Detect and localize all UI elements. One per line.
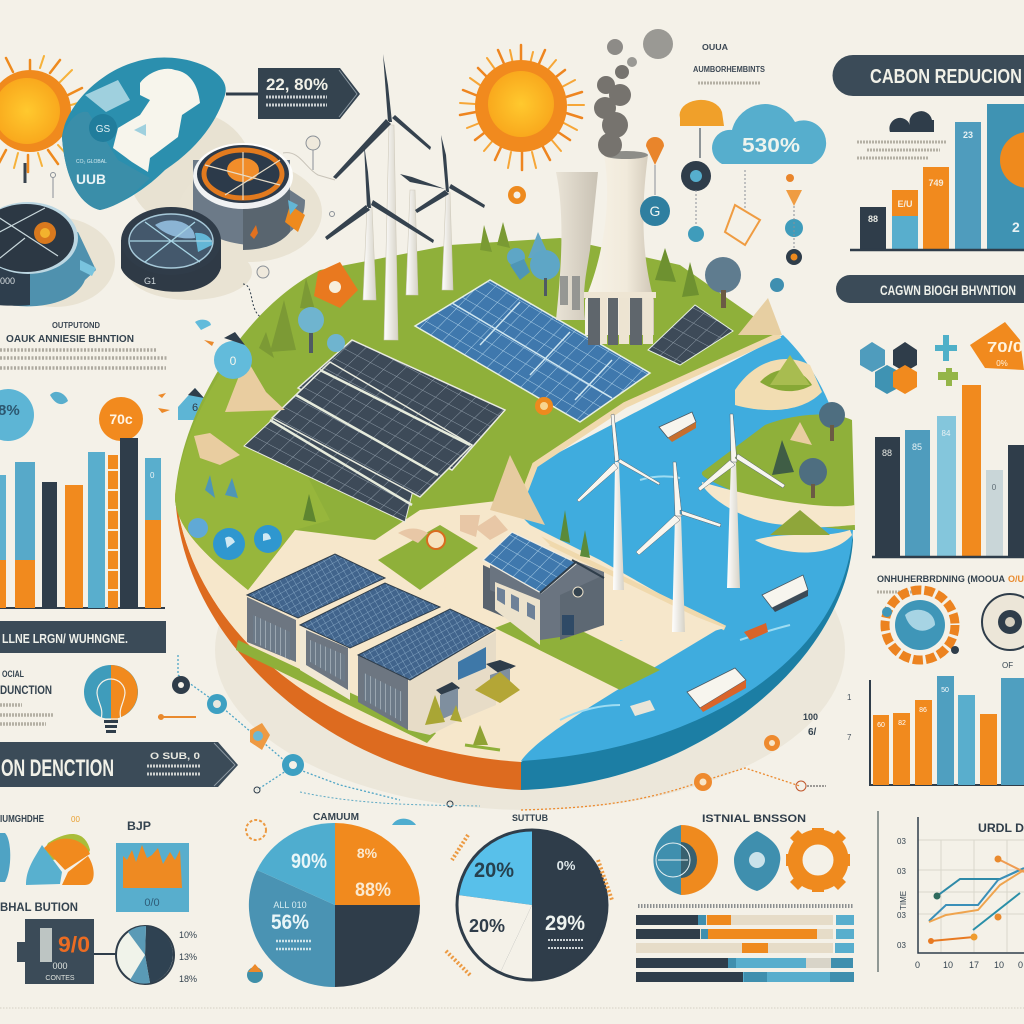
icon: cloud with percentage (712, 104, 826, 164)
pie: small dial (116, 926, 197, 984)
pie: half blue half orange (653, 825, 718, 895)
icon: small blue leaf (0, 833, 10, 882)
disc rim: blue (521, 520, 853, 790)
icon: gear globe (882, 590, 959, 660)
callout: dark percent box: CONTES (45, 975, 75, 982)
bar chart: middle right: 85 (912, 442, 922, 452)
icon: orange connector note (158, 715, 196, 719)
solar: blue array (415, 280, 650, 422)
pie: second pie: 0% (557, 858, 576, 873)
bar chart: top right: 749 (928, 178, 944, 188)
icon: callout droplet (195, 320, 252, 379)
heading: left dark bar: LLNE LRGN/ WUHNGNE. (2, 631, 128, 646)
line chart: right: URDL D (978, 821, 1024, 835)
icon: orange dial device (178, 143, 322, 262)
icon: energy pins (508, 100, 803, 265)
icon: left blue bubbles (0, 388, 212, 441)
icon: energy pins: G (650, 203, 660, 219)
icon: hexagon cluster: 0% (996, 359, 1008, 368)
heading: carbon emissions (836, 275, 1024, 303)
panel: top-left sun (0, 56, 90, 172)
text block: solution note (0, 669, 54, 724)
bar chart: middle right (872, 385, 1024, 557)
disc shadow (215, 490, 845, 810)
text: chart label: BJP (127, 819, 151, 833)
pie: second pie (445, 830, 612, 980)
icon: left blue bubbles: 6 (192, 402, 198, 414)
heading: pie one: CAMUUM (313, 812, 359, 823)
callout: dark percent box: 000 (52, 961, 68, 971)
heading: left section (0, 321, 168, 368)
icon: small pin markers (25, 136, 335, 326)
line chart: right: 03 (897, 837, 906, 846)
line chart: right: 17 (969, 960, 979, 970)
solar: dark array (244, 340, 505, 522)
callout: centre right percent: 100 (803, 712, 818, 722)
arrow: percent callout (226, 68, 360, 119)
buildings: factory row (236, 554, 520, 750)
icon: bottom link network (300, 735, 826, 810)
icon: dial: OF (1002, 661, 1013, 670)
bar chart: lower right: 50 (941, 687, 949, 694)
icon: left pie decorations (246, 819, 420, 983)
line chart: right: 03 (897, 911, 906, 920)
text block: solution note: DUNCTION (0, 683, 52, 697)
line chart: right: 03 (897, 867, 906, 876)
icon: left blue bubbles: 70c (109, 411, 133, 427)
pie: main carbon pie (249, 823, 420, 987)
bar chart: lower right: 1 (847, 693, 852, 702)
icon: hexagon cluster (860, 322, 1024, 394)
text block: top centre note: AUMBORHEMBINTS (693, 65, 766, 74)
text: bottom-left heading (0, 814, 80, 825)
icon: light bulb (84, 665, 138, 733)
solar: small array (648, 305, 733, 365)
text: social reduction label: BHAL BUTION (0, 900, 78, 914)
turbine: offshore right (698, 414, 785, 588)
boats (630, 412, 808, 716)
bar chart: lower right: 86 (919, 707, 927, 714)
callout: centre right percent: 6/ (808, 727, 817, 738)
panel: world map globe (62, 57, 252, 228)
arrow: carbon reduction banner: ON DENCTION (1, 755, 114, 782)
arrow: percent callout: 22, 80% (266, 75, 328, 94)
sand path (375, 500, 550, 592)
icon: hexagon cluster: 70/0 (987, 339, 1023, 356)
panel: island disc (175, 29, 855, 810)
pie: second pie: 20% (469, 916, 505, 936)
pie: small orange chart (26, 834, 94, 885)
bar chart: lower right: 82 (898, 720, 906, 727)
icon: dial (982, 594, 1024, 670)
line chart: right: 03 (897, 941, 906, 950)
line chart: right: TIME (899, 891, 908, 910)
pie: main carbon pie: 8% (357, 845, 378, 861)
turbine: onshore group (325, 54, 485, 340)
pie: main carbon pie: 56% (271, 911, 309, 934)
heading: pie two: SUTTUB (512, 813, 548, 823)
callout: map figure (76, 114, 117, 187)
text block: top centre note: OUUA (702, 43, 728, 52)
bar chart: top right: E/U (897, 199, 913, 209)
sand base (175, 380, 720, 762)
pie: main carbon pie: 88% (355, 880, 391, 901)
smoke (594, 29, 673, 157)
icon: cloud with percentage: 530% (742, 135, 800, 157)
icon: dark fan device with globe (121, 207, 252, 300)
trees and rocks (188, 222, 845, 560)
callout: dark percent box (17, 919, 116, 984)
arrow: carbon reduction banner (0, 742, 238, 787)
callout: map figure: CO₂ GLOBAL (76, 159, 107, 165)
pie: small dial: 10% (179, 930, 197, 940)
bar chart: middle right: 0 (992, 483, 997, 492)
chart: orange spikes (116, 843, 189, 912)
icon: process network (172, 655, 400, 800)
bar chart: lower right (847, 676, 1024, 785)
bar chart: top right: 2 (1012, 219, 1020, 235)
text block: right note (877, 574, 1024, 592)
icon: blue shield (734, 831, 780, 891)
line chart: right: 0 (1018, 960, 1023, 970)
heading: left dark bar (0, 621, 166, 653)
text block: top centre note (693, 43, 766, 83)
icon: blue explosion device: 000 (0, 276, 15, 286)
bar chart: middle right: 88 (882, 448, 892, 458)
disc rim: orange (175, 490, 521, 790)
line chart: right: 10 (943, 960, 953, 970)
chart: orange spikes: 0/0 (144, 897, 160, 909)
heading: carbon reduction (832, 55, 1024, 96)
bar chart: middle right: 84 (942, 429, 951, 438)
text block: solution note: OCIAL (2, 669, 24, 679)
text: bottom-left heading: 00 (71, 815, 80, 824)
icon: orange gear (786, 828, 850, 892)
text: bottom-left heading: IUMGHDHE (0, 814, 44, 825)
arrow: carbon reduction banner: O SUB, 0 (150, 751, 200, 761)
pie: small dial: 13% (179, 952, 197, 962)
callout: map figure: UUB (76, 171, 106, 187)
bar chart: top right: 23 (963, 130, 973, 140)
pie: main carbon pie: ALL 010 (273, 900, 307, 910)
bar chart: left bars: 0 (150, 471, 155, 480)
icon: dark fan device with globe: G1 (144, 276, 156, 286)
coast edge (512, 335, 780, 525)
text block: right note: ONHUHERBRDNING (MOOUA (877, 574, 1005, 584)
bar chart: lower right: 60 (877, 722, 885, 729)
line chart: right: 0 (915, 960, 920, 970)
pie: second pie: 29% (545, 912, 585, 935)
panel: top centre sun (460, 45, 584, 170)
land main (175, 238, 780, 590)
building: solar house (483, 532, 604, 645)
text block: right note: O/U (1008, 574, 1024, 584)
turbine: offshore left (577, 414, 660, 590)
callout: centre right percent (803, 712, 818, 738)
pie: small dial: 18% (179, 974, 197, 984)
callout: map figure: GS (96, 124, 111, 135)
bar chart: top right (850, 104, 1024, 250)
bar chart: top right: 88 (868, 214, 878, 224)
bar chart: left bars (0, 438, 165, 608)
turbine: offshore middle (636, 462, 721, 632)
chart: stacked bars (636, 906, 854, 982)
island: east right (702, 415, 855, 530)
icon: callout droplet: 0 (230, 354, 237, 368)
icon: blue explosion device (0, 202, 115, 307)
heading: left section: OAUK ANNIESIE BHNTION (6, 334, 134, 345)
line chart: right: 10 (994, 960, 1004, 970)
water (520, 335, 853, 761)
pie: second pie: 20% (474, 859, 514, 882)
heading: right section: ISTNIAL BNSSON (702, 813, 806, 825)
bottom dotted rule (0, 1007, 1024, 1009)
pie: main carbon pie: 90% (291, 850, 327, 873)
heading: left section: OUTPUTOND (52, 321, 100, 330)
island: north right (735, 359, 822, 410)
bar chart: lower right: 7 (847, 733, 852, 742)
line chart: right (878, 811, 1024, 972)
callout: dark percent box: 9/0 (58, 932, 90, 957)
power station: cooling towers (556, 151, 656, 345)
